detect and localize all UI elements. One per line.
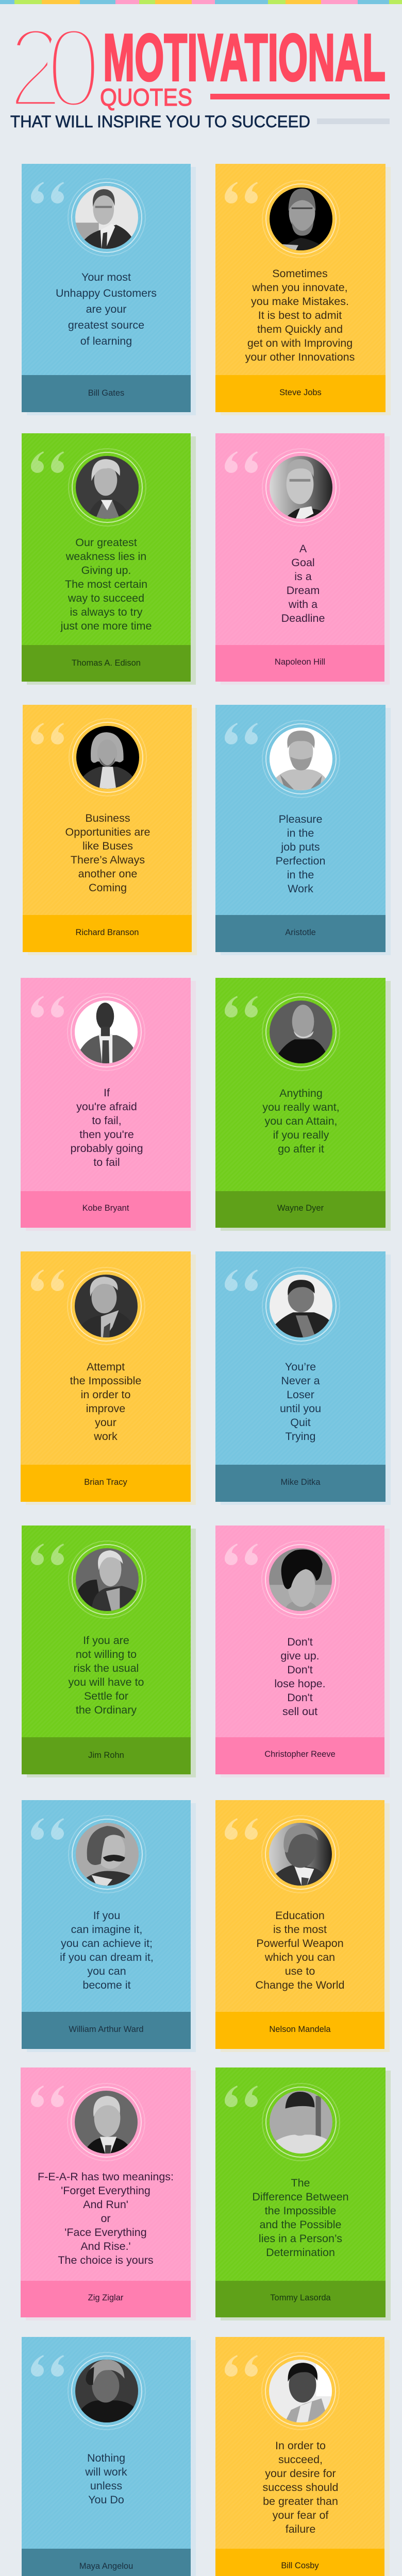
quote text: if you can dream it, [60,1951,154,1963]
author name: William Arthur Ward [69,2025,144,2034]
author name: Richard Branson [76,928,139,937]
icon: quote marks [31,996,64,1018]
quote text: you can achieve it; [61,1937,153,1950]
portrait: Napoleon Hill [262,448,340,527]
quote text: Loser [287,1388,314,1401]
panel: Zig Ziglar quote [21,2067,191,2317]
author name [22,2549,191,2576]
quote text [70,1361,141,1443]
quote text [85,2452,127,2506]
icon: quote marks [31,2355,64,2377]
panel: William Arthur Ward quote [22,1800,191,2049]
subtitle: THAT WILL INSPIRE YOU TO SUCCEED [10,112,310,131]
quote text: Perfection [276,855,325,867]
quote text: Sometimes [272,267,328,280]
quote text: is the most [273,1923,327,1936]
quote text: which you can [265,1951,335,1963]
quote text: you really want, [262,1101,340,1113]
quote text: Never a [281,1375,320,1387]
quote text: lies in a Person’s [259,2232,342,2245]
quote text: the Impossible [265,2205,336,2217]
quote text: Change the World [256,1979,344,1991]
quote text: Our greatest [75,536,137,549]
quote text: If [104,1087,110,1099]
portrait: Jim Rohn [68,1540,146,1619]
icon: quote marks [225,2355,258,2377]
portrait: Wayne Dyer [262,993,340,1071]
author name [22,645,191,682]
panel: Maya Angelou quote [22,2337,191,2576]
quote text [281,543,325,624]
quote text: The [291,2177,310,2189]
quote text: is always to try [70,606,142,618]
author name: Thomas A. Edison [72,658,141,668]
quote text: There’s Always [71,854,145,866]
portrait: Bill Gates [68,178,146,257]
quote text: risk the usual [74,1662,139,1674]
colour strip [0,0,402,4]
author name: Tommy Lasorda [270,2293,331,2302]
icon: quote marks [225,1818,258,1840]
portrait: Steve Jobs [262,180,340,258]
portrait: William Arthur Ward [68,1815,146,1893]
quote text: greatest source [68,319,144,331]
panel: Kobe Bryant quote [21,978,191,1228]
quote text [276,813,325,895]
quote text: and the Possible [260,2218,341,2231]
quote text: 'Face Everything [64,2226,147,2239]
author name [215,645,384,682]
quote text: in the [287,869,314,881]
portrait: Richard Branson [69,718,147,796]
quote text [65,812,150,894]
panel: Bill Cosby quote [215,2337,384,2576]
author name: Wayne Dyer [277,1204,324,1213]
quote text [56,271,157,347]
quote text: Anything [279,1087,323,1099]
author name [215,1191,386,1228]
quote text: failure [286,2523,315,2535]
quote text: use to [285,1965,315,1977]
author name [215,2012,384,2049]
quote text: A [299,543,307,555]
quote text: If you [93,1909,120,1922]
quote text: Business [85,812,130,824]
author name [23,915,192,952]
quote text [262,1087,340,1155]
quote text: go after it [278,1143,324,1155]
title word QUOTES: QUOTES [100,83,192,111]
quote text: you will have to [68,1676,144,1688]
quote text: Don't [287,1691,313,1704]
quote text: improve [86,1402,125,1415]
author name [22,375,191,412]
author name [22,1737,191,1774]
quote text: You Do [88,2494,124,2506]
panel: Nelson Mandela quote [215,1800,384,2049]
quote text: to fail [93,1156,120,1168]
quote text: you can Attain, [264,1115,338,1127]
quote text: Dream [287,584,320,597]
quote text: In order to [275,2439,326,2452]
author name [215,375,386,412]
panel: Tommy Lasorda quote [215,2067,386,2317]
quote text: in the [287,827,314,839]
panel: Napoleon Hill quote [215,433,384,682]
author name: Jim Rohn [88,1751,124,1760]
portrait: Brian Tracy [67,1267,145,1345]
quote text: probably going [70,1142,143,1155]
icon: quote marks [225,2086,258,2107]
quote text: get on with Improving [247,337,353,349]
icon: quote marks [31,1544,64,1565]
quote text: your fear of [273,2509,328,2521]
icon: quote marks [225,1544,258,1565]
quote text: succeed, [278,2453,323,2466]
quote text [245,267,355,363]
quote text: way to succeed [68,592,144,604]
author name: Mike Ditka [280,1478,321,1487]
quote text: when you innovate, [252,281,348,294]
title number 20: 0 [46,4,101,131]
quote text: the Impossible [70,1375,141,1387]
quote text [60,536,152,632]
quote text: Pleasure [279,813,322,825]
quote text: give up. [280,1650,320,1662]
quote text: Coming [89,882,127,894]
author name: Bill Gates [88,388,124,398]
title [8,4,390,131]
quote text: or [100,2212,111,2225]
quote text: Deadline [281,612,325,624]
quote text: your [95,1416,116,1429]
author name [215,2281,386,2317]
quote text: become it [82,1979,131,1991]
quote text: And Rise.' [80,2240,131,2252]
author name [21,2281,191,2317]
quote text: lose hope. [274,1677,326,1690]
quote text: will work [85,2466,127,2478]
quote text: if you really [273,1129,329,1141]
quote text: unless [90,2480,122,2492]
quote text: of learning [80,335,132,347]
quote text: You’re [285,1361,316,1373]
author name: Bill Cosby [281,2561,319,2570]
quote text: like Buses [82,840,133,852]
author name: Nelson Mandela [269,2025,331,2034]
portrait: Nelson Mandela [261,1815,340,1893]
quote text: Opportunities are [65,826,150,838]
quote text: is a [294,570,312,583]
title number 20: 2 [8,4,63,131]
icon: quote marks [225,182,258,204]
icon: quote marks [225,723,258,744]
quote text [274,1636,326,1718]
portrait: Mike Ditka [262,1267,340,1345]
quote text: Your most [81,271,131,283]
portrait: Aristotle [262,720,340,798]
quote text: until you [280,1402,321,1415]
author name: Napoleon Hill [275,657,325,667]
author name: Christopher Reeve [264,1750,336,1759]
quote text: It is best to admit [258,309,342,321]
quote text: Goal [291,556,315,569]
quote text: sell out [282,1705,317,1718]
author name [21,1191,191,1228]
title number 20 [8,4,101,131]
portrait: Tommy Lasorda [262,2083,340,2161]
panel: Steve Jobs quote [215,164,386,412]
icon: quote marks [225,996,258,1018]
quote text: be greater than [263,2495,338,2507]
quote text: just one more time [61,620,152,632]
author name [215,915,386,952]
quote text: with a [289,598,317,611]
author name: Kobe Bryant [82,1204,129,1213]
author name: Brian Tracy [84,1478,127,1487]
panel: Bill Gates quote [22,164,191,412]
author name [215,1465,386,1502]
icon: quote marks [31,182,64,204]
author name [215,2549,384,2576]
quote text: you can [87,1965,126,1977]
panel: Christopher Reeve quote [215,1526,384,1774]
quote text [263,2439,338,2535]
author name: Aristotle [285,928,316,937]
author name [22,2012,191,2049]
icon: quote marks [31,2086,64,2107]
portrait: Bill Cosby [261,2352,340,2430]
quote text [68,1634,144,1716]
quote text: success should [263,2481,338,2494]
quote text: Difference Between [252,2191,349,2203]
quote text: in order to [81,1388,130,1401]
quote text: Don't [287,1636,313,1648]
quote text: Education [275,1909,325,1922]
quote text: can imagine it, [71,1923,142,1936]
quote text: Giving up. [81,564,131,577]
quote text: weakness lies in [66,550,146,563]
quote text: Work [288,883,313,895]
quote text: The most certain [65,578,147,590]
quote text: them Quickly and [257,323,343,335]
quote text [256,1909,344,1991]
icon: quote marks [31,1269,64,1291]
quote text: And Run' [83,2198,128,2211]
quote text [252,2177,349,2259]
quote text [38,2171,174,2266]
panel: Mike Ditka quote [215,1251,386,1502]
panel: Wayne Dyer quote [215,978,386,1228]
author name: Zig Ziglar [88,2293,123,2302]
panel: Brian Tracy quote [21,1251,191,1502]
author name: Maya Angelou [79,2562,133,2571]
quote text: F-E-A-R has two meanings: [38,2171,174,2183]
portrait: Maya Angelou [68,2352,146,2430]
quote text: Determination [266,2246,335,2259]
quote text [70,1087,143,1168]
portrait: Zig Ziglar [67,2083,145,2161]
grey rule [317,118,390,124]
quote text: to fail, [92,1114,122,1127]
icon: quote marks [225,1269,258,1291]
quote text [280,1361,321,1443]
quote text: Trying [286,1430,315,1443]
icon: quote marks [31,723,64,744]
quote text: Settle for [84,1690,128,1702]
quote text: Don't [287,1664,313,1676]
quote text: are your [86,303,126,315]
quote text: the Ordinary [76,1704,137,1716]
quote text: 'Forget Everything [61,2184,150,2197]
quote text: Unhappy Customers [56,287,157,299]
quote text: you make Mistakes. [251,295,349,308]
quote text: not willing to [76,1648,137,1660]
author name: Steve Jobs [279,388,322,397]
quote text: Quit [290,1416,311,1429]
panel: Thomas A. Edison quote [22,433,191,682]
icon: quote marks [225,451,258,473]
panel: Aristotle quote [215,705,386,952]
portrait: Christopher Reeve [261,1540,340,1619]
icon: quote marks [31,451,64,473]
quote text: The choice is yours [58,2254,154,2266]
portrait: Kobe Bryant [67,993,145,1071]
quote text: your other Innovations [245,351,355,363]
quote text: another one [78,868,137,880]
quote text: your desire for [265,2467,336,2480]
panel: Jim Rohn quote [22,1526,191,1774]
quote text: then you're [79,1128,134,1141]
author name [215,1737,384,1774]
panel: Richard Branson quote [23,705,192,952]
quote text: work [94,1430,118,1443]
red rule [210,94,390,99]
quote text [60,1909,154,1991]
quote text: Attempt [87,1361,125,1373]
quote text: Nothing [87,2452,125,2464]
author name [21,1465,191,1502]
quote text: you're afraid [76,1100,137,1113]
quote text: If you are [83,1634,129,1647]
quote text: Powerful Weapon [256,1937,344,1950]
portrait: Thomas A. Edison [68,448,146,527]
icon: quote marks [31,1818,64,1840]
quote text: job puts [281,841,320,853]
